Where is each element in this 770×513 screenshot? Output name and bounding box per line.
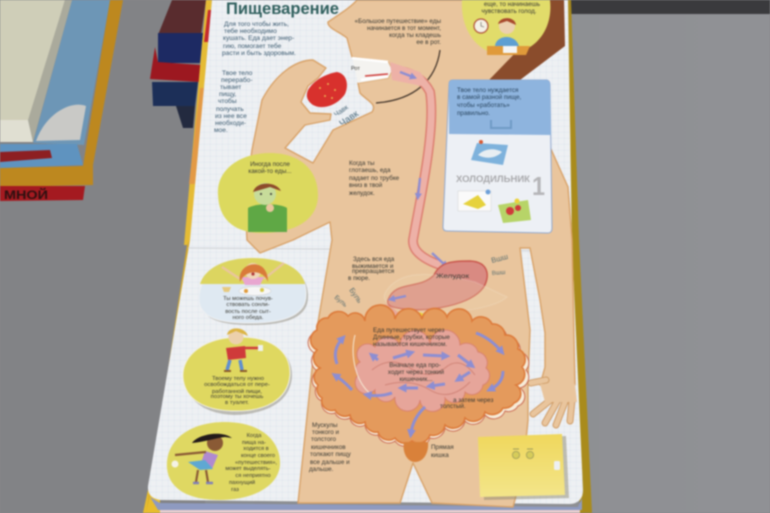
intro text: расти и быть здоровым. [222,49,296,57]
icon: sick boy [248,183,287,232]
flap edge [353,335,375,397]
sound words: whoosh: Вшш [490,252,509,265]
icon: fish picture [471,140,508,165]
text: small intestine: Вначале еда про- [389,362,441,369]
icon: fridge handle [491,120,511,128]
text: small intestine: ходит через тонкий [388,368,445,376]
text: swallowing: глотаешь, еда [349,167,391,174]
sound words: chomp: Чавк [337,108,361,129]
text: intestines: Длинные, трубки, которые [373,333,450,341]
text: muscles: Мускулы [312,422,338,429]
flap: toilet: работанной пищи, [212,388,262,395]
human body figure [245,0,575,507]
text: swallowing: падает по трубке [349,174,400,182]
circle: sometimes after food: Иногда после [250,161,290,168]
oesophagus [390,62,445,265]
book spine text: МНОЙ [4,187,48,202]
circle: gas: может выделять- [225,466,271,472]
intro text: кушать. Еда дает энер- [223,35,294,42]
sound words: gurgle: Буль [347,286,364,305]
fridge number: 1 [532,171,545,201]
text: swallowing [349,160,400,197]
flap: sleepiness: вость после сыт- [225,309,271,315]
text: squeeze: выжимается и [352,263,394,270]
circle: gas: ся неприятно [235,473,271,479]
intro text: Для того чтобы жить, [224,20,289,28]
icon: boy at desk [487,18,530,55]
digestion arrows [335,333,503,433]
hair [489,0,565,80]
flap: sleepiness: ствовать сонли- [226,302,270,308]
flap: sleepiness: Ты можешь почув- [223,296,273,302]
intro text: тебе необходимо [224,27,277,35]
circle: hunger: еще, то начинаешь [484,1,541,8]
circle: gas: конце своего [241,453,275,459]
text: swallowing: вниз в твой [349,181,383,189]
label: mouth: Рот [351,66,360,72]
label: stomach: Желудок [436,274,469,280]
text: muscles: тонкого и [312,429,340,436]
text: big journey [355,18,442,46]
text: body processes food: Твое тело [222,70,253,77]
icon: clock [474,19,488,33]
fridge label: ХОЛОДИЛЬНИК [456,174,531,184]
blue card: fridge flap: правильно. [457,110,490,117]
stack of books left [0,0,123,202]
flap: sleepiness [199,258,308,325]
text: muscles: дальше. [309,466,334,473]
flap: sleepiness: ного обеда. [232,315,264,321]
text: large intestine: толстый. [440,402,466,410]
stack of books right of the left stack [150,0,206,128]
label: rectum: кишка [431,452,449,459]
circle: gas: Когда [247,433,262,439]
sound words: whoosh [490,252,509,277]
yellow sticky flap [478,434,569,500]
flap: toilet: освобождаться от пере- [204,382,270,388]
text: squeeze: Здесь вся еда [353,256,395,263]
title: Пищеварение [226,0,339,18]
label: rectum [431,444,454,459]
circle: hunger: чувствовать голод. [481,8,537,15]
circle: sometimes after food [218,153,318,233]
text: small intestine: кишечник... [400,376,433,383]
small intestine [355,330,490,412]
large intestine [308,305,529,446]
flap: toilet: в туалет. [225,400,249,406]
sound words: chomp [333,104,361,129]
flap: toilet: Твоему телу нужно [212,376,265,382]
text: large intestine [440,397,494,410]
book cover yellow edges [143,0,592,513]
right hand fingers [531,380,577,425]
blue card: fridge flap [443,80,552,233]
intro text [222,20,296,57]
icon: plate [222,286,271,296]
mouth flap [352,50,440,103]
text: body processes food: чтобы [218,97,237,105]
text: squeeze: превращается [352,268,394,275]
icon: small figures [512,449,534,459]
circle: gas: пища на- [242,440,266,446]
text: body processes food: перерабо- [221,76,253,84]
circle: gas: газ [231,487,239,493]
text: intestines: называются кишечником. [373,341,447,348]
text: body processes food: из нее все [215,113,247,120]
text: muscles: все дальше и [310,459,350,466]
sound words: whoosh: Вшш [492,270,506,277]
icon: strawberries picture [498,198,531,223]
icon: girl [172,434,232,483]
text: big journey: когда ты кладешь [389,32,442,39]
circle: gas: пахнущий [229,479,255,486]
blue card: fridge flap: чтобы «работать» [457,101,510,109]
sound words: gurgle: Буль [333,294,349,309]
icon: cheese picture [458,190,491,211]
circle: hunger [462,0,550,55]
circle: sometimes after food: какой-то еды... [248,167,292,175]
text: body processes food [214,70,253,134]
text: squeeze [348,256,395,282]
text: body processes food: мое. [214,127,228,134]
sound words: gurgle [333,286,364,309]
intro text: гию, помогает тебе [223,42,282,50]
icon: girl after dinner [222,263,284,285]
blue card: fridge flap: Твое тело нуждается [457,87,518,94]
text: body processes food: необходи- [215,119,246,127]
text: body processes food: пищу, [219,91,236,98]
book page [148,0,583,513]
flap: toilet: поэтому ты хочешь [211,394,263,400]
blue card: fridge flap: в самой разной пище, [457,93,521,101]
text: muscles: кишечников [311,444,346,451]
text: large intestine: а затем через [453,397,494,404]
text: big journey: «Большое путешествие» еды [355,18,441,25]
text: big journey: ее в рот. [416,39,441,46]
icon: tab [554,461,560,470]
flap: toilet [183,328,292,415]
text: small intestine [388,362,445,383]
text: muscles: толкают пищу [310,451,352,458]
text: squeeze: в пюре. [348,275,370,282]
sound words: chomp: Чавк [333,104,350,119]
circle: gas: «путешествия», [235,460,277,466]
label: rectum: Прямая [431,444,454,451]
text: muscles: толстого [311,436,336,443]
strawberry [307,72,347,107]
text: body processes food: тывает [220,84,241,91]
text: big journey: начинается в тот момент, [367,25,441,32]
rectum [404,442,428,462]
circle: gas: ходится в [243,446,269,452]
text: muscles [309,422,352,473]
text: swallowing: желудок. [349,190,375,197]
text: body processes food: получать [216,106,244,113]
stomach [383,261,507,323]
icon: boy [224,328,263,371]
text: intestines: Еда путешествует через [373,327,444,334]
text: intestines [373,327,450,348]
text: swallowing: Когда ты [349,160,375,167]
circle: gas [167,422,280,500]
